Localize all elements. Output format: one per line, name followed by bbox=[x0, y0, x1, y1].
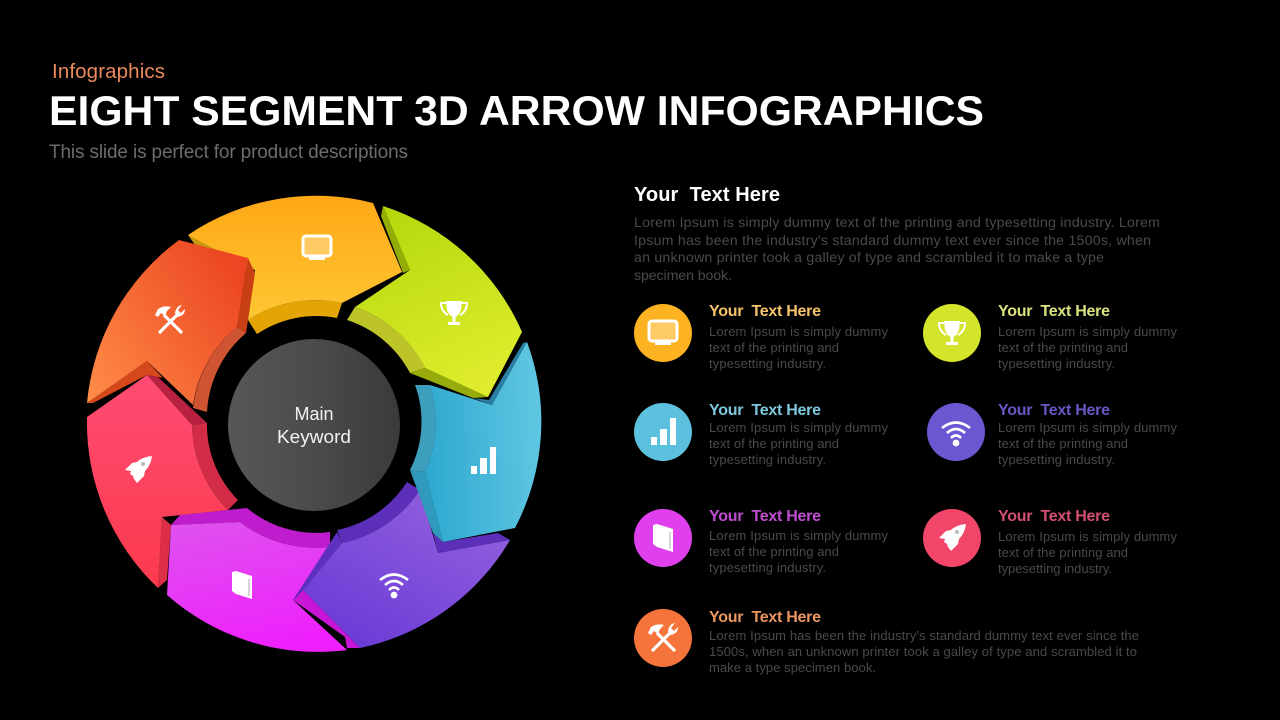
icon: trophy bbox=[441, 301, 467, 325]
item: red: Your Text Here bbox=[998, 508, 1110, 525]
item: red: text of the printing and bbox=[998, 545, 1128, 560]
main text block: an unknown printer took a galley of type and scrambled it to make a type bbox=[634, 250, 1104, 266]
subtitle: This slide is perfect for product descriptions bbox=[49, 142, 408, 163]
item: orange: make a type specimen book. bbox=[709, 660, 876, 675]
segment: green trophy bbox=[347, 206, 522, 398]
wheel diagram bbox=[87, 196, 541, 652]
icon: signal bars bbox=[471, 447, 496, 474]
item: orange: Lorem Ipsum has been the industry's standard dummy text ever since the bbox=[709, 628, 1139, 643]
item: red bbox=[923, 508, 1178, 576]
segment: magenta book bbox=[167, 508, 360, 652]
item: red: typesetting industry. bbox=[998, 561, 1112, 576]
item: green: Your Text Here bbox=[998, 303, 1110, 320]
item: yellow: typesetting industry. bbox=[709, 356, 826, 371]
item: magenta: typesetting industry. bbox=[709, 560, 826, 575]
center keyword circle: Main bbox=[294, 404, 334, 424]
segment: red rocket bbox=[87, 375, 238, 588]
item: purple bbox=[927, 402, 1178, 467]
main text block: Ipsum has been the industry's standard dummy text ever since the 1500s, when bbox=[634, 233, 1151, 249]
item: green: typesetting industry. bbox=[998, 356, 1115, 371]
item: green: Lorem Ipsum is simply dummy bbox=[998, 324, 1178, 339]
item: blue: text of the printing and bbox=[709, 436, 839, 451]
icon: tools bbox=[155, 305, 185, 333]
segment: purple wifi bbox=[293, 482, 510, 648]
item: purple: text of the printing and bbox=[998, 436, 1128, 451]
item: orange: Your Text Here bbox=[709, 609, 821, 626]
item: purple: Your Text Here bbox=[998, 402, 1110, 419]
icon: book bbox=[232, 571, 252, 599]
item: yellow: text of the printing and bbox=[709, 340, 839, 355]
item: green: text of the printing and bbox=[998, 340, 1128, 355]
icon: monitor bbox=[303, 236, 331, 260]
segment: blue bars bbox=[410, 342, 541, 542]
item: blue bbox=[634, 402, 888, 467]
item: magenta: Your Text Here bbox=[709, 508, 821, 525]
center keyword circle: Keyword bbox=[277, 427, 351, 447]
item: purple: typesetting industry. bbox=[998, 452, 1115, 467]
item: blue: Your Text Here bbox=[709, 402, 821, 419]
item: yellow bbox=[634, 303, 888, 371]
item: green bbox=[923, 303, 1178, 371]
item: magenta: Lorem Ipsum is simply dummy bbox=[709, 528, 888, 543]
item: red: Lorem Ipsum is simply dummy bbox=[998, 529, 1178, 544]
main text block: Lorem Ipsum is simply dummy text of the printing and typesetting industry. Lorem bbox=[634, 215, 1160, 231]
item: magenta bbox=[634, 508, 888, 575]
main text block bbox=[634, 184, 1160, 284]
segment: orange tools bbox=[87, 240, 255, 412]
item: magenta: text of the printing and bbox=[709, 544, 839, 559]
icon: wifi bbox=[380, 574, 408, 598]
icon: rocket bbox=[125, 456, 152, 483]
item: purple: Lorem Ipsum is simply dummy bbox=[998, 420, 1178, 435]
item: yellow: Your Text Here bbox=[709, 303, 821, 320]
item: orange: 1500s, when an unknown printer took a galley of type and scrambled it to bbox=[709, 644, 1137, 659]
title: EIGHT SEGMENT 3D ARROW INFOGRAPHICS bbox=[49, 87, 984, 134]
segment: yellow monitor bbox=[188, 196, 402, 334]
item: blue: Lorem Ipsum is simply dummy bbox=[709, 420, 888, 435]
item: yellow: Lorem Ipsum is simply dummy bbox=[709, 324, 888, 339]
eyebrow label: Infographics bbox=[52, 60, 165, 83]
item: blue: typesetting industry. bbox=[709, 452, 826, 467]
item: orange bbox=[634, 609, 1139, 675]
main text block: specimen book. bbox=[634, 268, 732, 284]
center keyword circle bbox=[228, 339, 400, 511]
main text block: Your Text Here bbox=[634, 184, 780, 206]
